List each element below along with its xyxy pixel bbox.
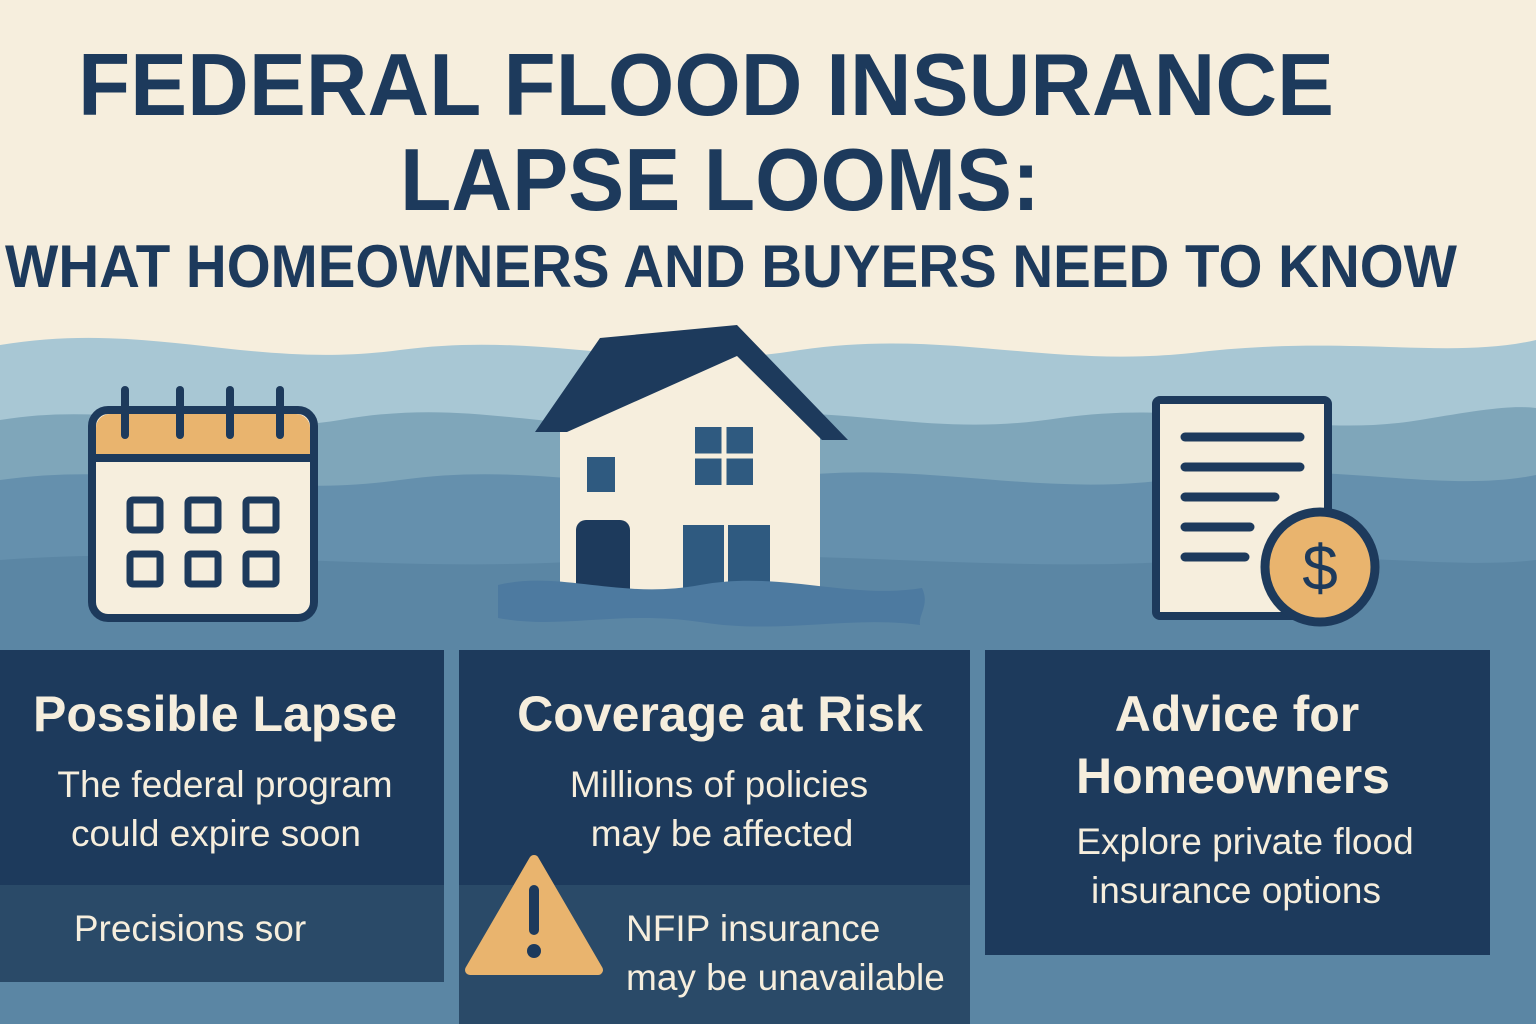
panel: possible lapse: The federal program bbox=[57, 764, 393, 805]
panel: coverage at risk: Millions of policies bbox=[570, 764, 868, 805]
panel: possible lapse: Possible Lapse bbox=[33, 686, 397, 742]
panel: coverage at risk bbox=[459, 650, 970, 1024]
panel: advice for homeowners bbox=[985, 650, 1490, 955]
icon: document with dollar: $ bbox=[1302, 532, 1338, 604]
panel: coverage at risk: NFIP insurance bbox=[626, 908, 880, 949]
panel: advice for homeowners: Advice for bbox=[1115, 686, 1359, 742]
title: FEDERAL FLOOD INSURANCE bbox=[78, 35, 1334, 134]
icon: warning bbox=[470, 860, 598, 970]
panel: advice for homeowners: insurance options bbox=[1091, 870, 1381, 911]
title bbox=[5, 35, 1457, 300]
icon: calendar bbox=[92, 390, 314, 618]
panel: coverage at risk: may be affected bbox=[591, 813, 853, 854]
icon: house in flood bbox=[498, 325, 925, 627]
title: WHAT HOMEOWNERS AND BUYERS NEED TO KNOW bbox=[5, 233, 1457, 300]
waves background bbox=[0, 338, 1536, 1024]
icon: document with dollar bbox=[1156, 400, 1375, 622]
panel: coverage at risk: Coverage at Risk bbox=[517, 686, 923, 742]
panel: advice for homeowners: Explore private flood bbox=[1076, 821, 1414, 862]
panel: possible lapse: Precisions sor bbox=[74, 908, 306, 949]
panel: coverage at risk: may be unavailable bbox=[626, 957, 945, 998]
panel: possible lapse bbox=[0, 650, 444, 982]
panel: possible lapse: could expire soon bbox=[71, 813, 361, 854]
panel: advice for homeowners: Homeowners bbox=[1076, 748, 1390, 804]
title: LAPSE LOOMS: bbox=[400, 130, 1040, 229]
